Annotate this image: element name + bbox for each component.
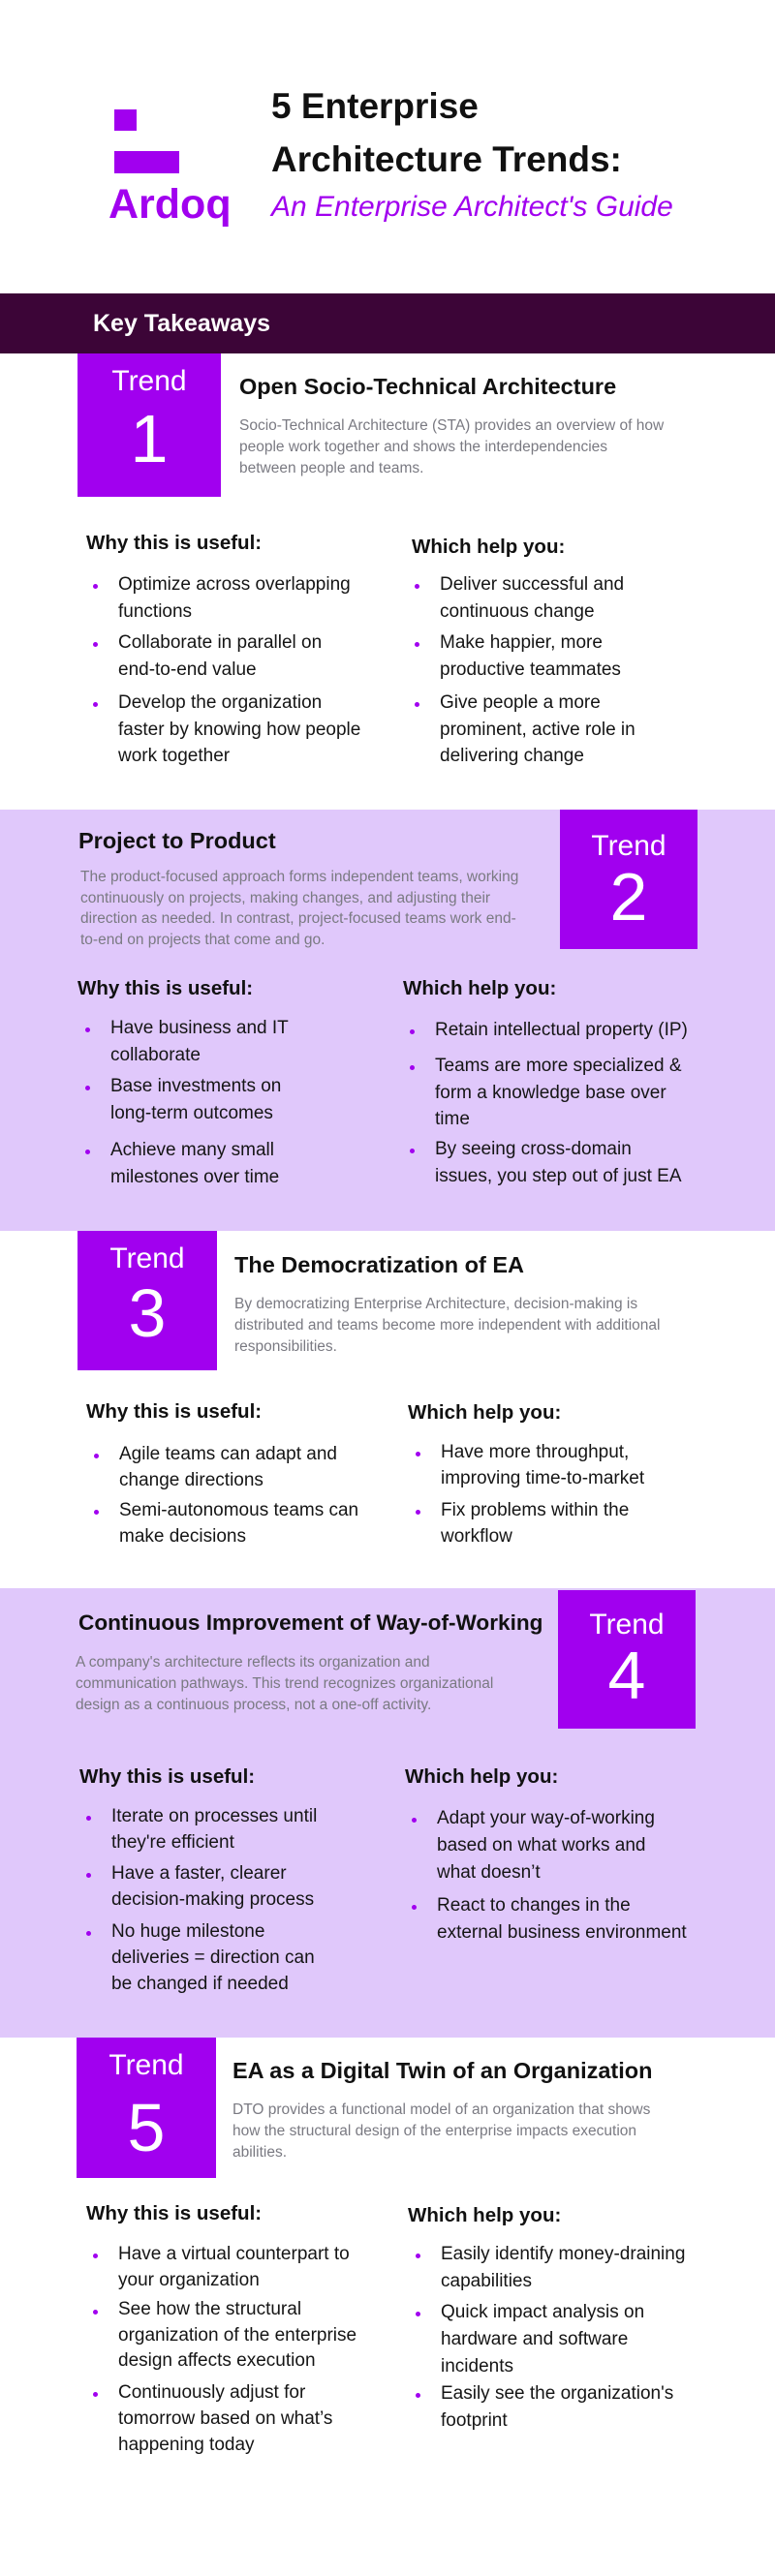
trend 5 why list: organization of the enterprise (118, 2324, 356, 2346)
trend 3 title: The Democratization of EA (234, 1252, 524, 1277)
trend 4 help list: what doesn’t (437, 1862, 541, 1883)
trend 4 help list (412, 1808, 687, 1943)
trend 1 title: Open Socio-Technical Architecture (239, 374, 616, 399)
trend 1 help heading: Which help you: (412, 536, 565, 558)
trend 5 badge: 5 (128, 2090, 165, 2165)
panel: trend 3 (78, 1231, 660, 1547)
trend 5 why list: tomorrow based on what’s (118, 2408, 332, 2429)
trend 1 help list: Make happier, more (440, 632, 603, 653)
trend 3 help heading: Which help you: (408, 1401, 561, 1424)
trend 2 help list: By seeing cross-domain (435, 1139, 632, 1159)
title: 5 Enterprise (271, 86, 479, 126)
trend 3 help list: workflow (441, 1526, 512, 1547)
trend 1 why list: Collaborate in parallel on (118, 632, 322, 653)
panel: trend 5 (77, 2038, 685, 2455)
trend 1 description: Socio-Technical Architecture (STA) provides an overview of how (239, 417, 664, 434)
trend 5 description: how the structural design of the enterprise impacts execution (232, 2123, 636, 2139)
trend 2 help list: form a knowledge base over (435, 1083, 666, 1102)
trend 2 why list: collaborate (110, 1044, 201, 1065)
trend 5 description: DTO provides a functional model of an organization that shows (232, 2101, 650, 2118)
trend 5 help list: hardware and software (441, 2329, 628, 2349)
trend 2 why list: long-term outcomes (110, 1102, 273, 1123)
trend 5 why list: Have a virtual counterpart to (118, 2244, 350, 2264)
trend 3 help list: Fix problems within the (441, 1500, 629, 1520)
trend 1 badge (78, 353, 221, 497)
logo: Ardoq (108, 109, 232, 228)
title: Architecture Trends: (271, 139, 622, 179)
logo: Ardoq: Ardoq (108, 181, 232, 228)
trend 3 why list (94, 1444, 358, 1547)
trend 3 why heading: Why this is useful: (86, 1400, 262, 1423)
trend 2 why list: Achieve many small (110, 1140, 274, 1160)
trend 4 why list: Iterate on processes until (111, 1806, 317, 1826)
trend 5 help list: footprint (441, 2410, 508, 2431)
trend 1 help list: Give people a more (440, 692, 601, 713)
trend 5 help list: Easily see the organization's (441, 2383, 673, 2404)
trend 2 help list: Teams are more specialized & (435, 1056, 682, 1076)
trend 5 help list (416, 2244, 685, 2431)
trend 1 why heading: Why this is useful: (86, 532, 262, 554)
trend 4 why list: deliveries = direction can (111, 1947, 315, 1968)
trend 1 why list: end-to-end value (118, 659, 257, 680)
banner: Key Takeaways: Key Takeaways (93, 310, 270, 337)
trend 5 why list: See how the structural (118, 2299, 301, 2319)
trend 3 why list: Agile teams can adapt and (119, 1444, 337, 1464)
trend 1 help list: productive teammates (440, 659, 621, 680)
trend 1 description (239, 417, 665, 476)
trend 3 why list: change directions (119, 1470, 264, 1490)
trend 4 description (76, 1654, 493, 1713)
subtitle: An Enterprise Architect's Guide (271, 191, 673, 223)
trend 2 help list: issues, you step out of just EA (435, 1166, 682, 1185)
trend 2 description: to-end on projects that come and go. (80, 932, 325, 948)
trend 5 help list: capabilities (441, 2271, 532, 2291)
trend 2 help list (410, 1020, 688, 1185)
trend 2 title: Project to Product (78, 828, 276, 853)
trend 2 why list: Have business and IT (110, 1018, 289, 1038)
trend 5 description: abilities. (232, 2144, 287, 2161)
trend 5 help list: incidents (441, 2356, 513, 2377)
trend 2 help heading: Which help you: (403, 977, 556, 999)
trend 1 why list: faster by knowing how people (118, 719, 360, 740)
trend 4 help list: based on what works and (437, 1835, 645, 1855)
trend 5 help list: Quick impact analysis on (441, 2302, 644, 2322)
trend 5 help heading: Which help you: (408, 2204, 561, 2226)
trend 4 why list: decision-making process (111, 1889, 314, 1910)
trend 4 why heading: Why this is useful: (79, 1765, 255, 1788)
panel: trend 2 (0, 810, 775, 1231)
trend 3 description: responsibilities. (234, 1338, 337, 1355)
trend 4 why list: No huge milestone (111, 1921, 264, 1942)
trend 4 description: design as a continuous process, not a one-off activity. (76, 1697, 431, 1713)
trend 2 description (80, 869, 518, 948)
trend 5 why list: Continuously adjust for (118, 2382, 305, 2403)
trend 1 help list: continuous change (440, 600, 595, 622)
trend 4 badge: 4 (608, 1638, 645, 1713)
trend 4 help list: React to changes in the (437, 1895, 631, 1916)
trend 4 why list: be changed if needed (111, 1974, 289, 1994)
trend 5 help list: Easily identify money-draining (441, 2244, 685, 2264)
trend 1 badge: 1 (131, 401, 168, 476)
trend 1 badge: Trend (111, 365, 187, 397)
trend 3 help list: Have more throughput, (441, 1442, 629, 1462)
trend 1 why list: functions (118, 600, 192, 622)
trend 2 badge (560, 810, 698, 949)
trend 3 description (234, 1296, 660, 1355)
trend 4 description: communication pathways. This trend recognizes organizational (76, 1675, 493, 1692)
trend 1 help list: Deliver successful and (440, 574, 624, 595)
trend 5 why heading: Why this is useful: (86, 2202, 262, 2224)
trend 1 why list: Develop the organization (118, 692, 322, 713)
trend 4 why list: they're efficient (111, 1832, 234, 1853)
panel: trend 4 (0, 1588, 775, 2038)
trend 1 description: between people and teams. (239, 460, 423, 476)
trend 1 description: people work together and shows the interdependencies (239, 439, 607, 455)
trend 4 help list: Adapt your way-of-working (437, 1808, 655, 1828)
trend 4 help list: external business environment (437, 1922, 687, 1943)
trend 2 why list: milestones over time (110, 1166, 279, 1187)
trend 4 badge: Trend (589, 1609, 665, 1641)
trend 4 description: A company's architecture reflects its organization and (76, 1654, 430, 1671)
trend 4 title: Continuous Improvement of Way-of-Working (78, 1610, 542, 1635)
trend 3 help list: improving time-to-market (441, 1468, 644, 1488)
trend 3 why list: Semi-autonomous teams can (119, 1500, 358, 1520)
trend 1 help list (415, 574, 636, 766)
trend 2 help list: Retain intellectual property (IP) (435, 1020, 688, 1040)
trend 3 help list (416, 1442, 644, 1547)
trend 2 description: direction as needed. In contrast, project-focused teams work end- (80, 910, 516, 927)
trend 2 why list (85, 1018, 289, 1187)
trend 5 title: EA as a Digital Twin of an Organization (232, 2058, 653, 2083)
trend 4 why list: Have a faster, clearer (111, 1863, 287, 1884)
trend 2 badge: 2 (610, 859, 647, 935)
trend 5 why list: happening today (118, 2435, 255, 2455)
trend 2 badge: Trend (591, 830, 666, 862)
trend 5 badge (77, 2038, 216, 2178)
trend 5 why list: design affects execution (118, 2350, 316, 2371)
trend 3 description: By democratizing Enterprise Architecture, decision-making is (234, 1296, 637, 1312)
trend 1 help list: delivering change (440, 746, 584, 766)
trend 2 why list: Base investments on (110, 1076, 281, 1096)
trend 3 badge (78, 1231, 217, 1370)
title (271, 86, 622, 179)
trend 1 help list: prominent, active role in (440, 719, 636, 740)
trend 3 why list: make decisions (119, 1526, 246, 1547)
trend 3 badge: Trend (109, 1242, 185, 1274)
trend 5 badge: Trend (108, 2049, 184, 2081)
trend 4 help heading: Which help you: (405, 1765, 558, 1788)
trend 5 why list: your organization (118, 2270, 260, 2290)
trend 3 description: distributed and teams become more independent with additional (234, 1317, 660, 1334)
trend 2 description: continuously on projects, making changes, and adjusting their (80, 890, 490, 906)
trend 2 help list: time (435, 1109, 470, 1129)
banner: Key Takeaways (0, 293, 775, 353)
trend 3 badge: 3 (129, 1275, 166, 1351)
trend 5 description (232, 2101, 650, 2161)
trend 2 description: The product-focused approach forms independent teams, working (80, 869, 518, 885)
trend 1 why list (93, 574, 360, 766)
trend 2 why heading: Why this is useful: (78, 977, 253, 999)
trend 4 badge (558, 1590, 696, 1729)
trend 5 why list (93, 2244, 356, 2455)
trend 4 why list (86, 1806, 317, 1994)
trend 1 why list: work together (118, 746, 230, 766)
trend 1 why list: Optimize across overlapping (118, 574, 351, 595)
panel: trend 1 (78, 353, 665, 766)
